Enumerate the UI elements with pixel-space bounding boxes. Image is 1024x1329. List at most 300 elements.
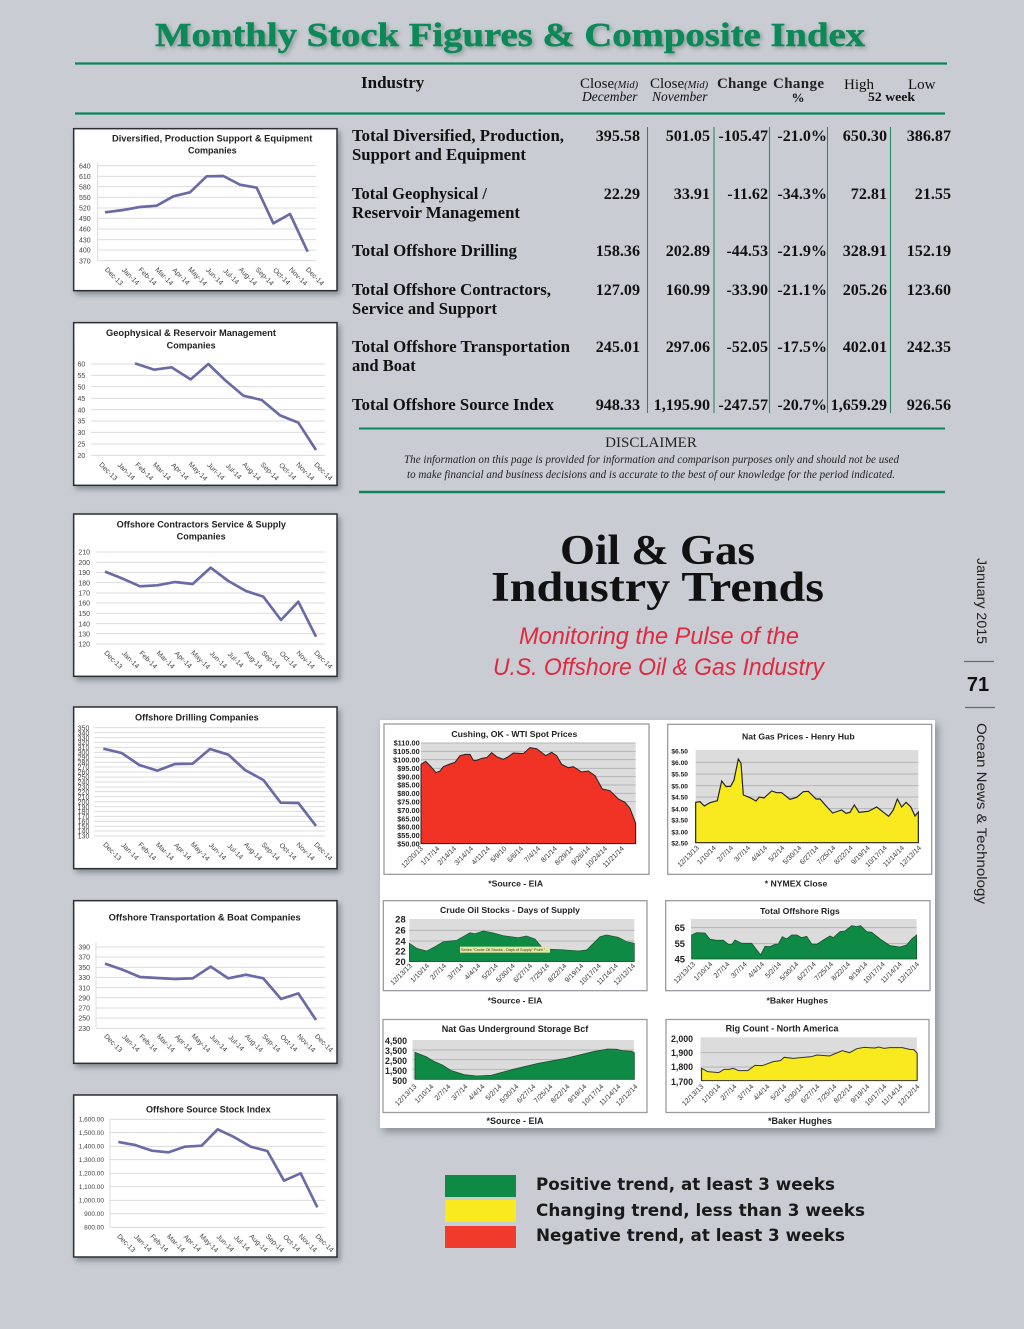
line chart: diversified: May-14: [186, 266, 208, 288]
legend: Changing trend, less than 3 weeks: [536, 1201, 865, 1221]
area chart: nat gas storage: 1,500: [385, 1066, 407, 1076]
area chart: total offshore rigs: 7/25/14: [814, 961, 835, 983]
row: drilling: [352, 241, 951, 260]
area chart: nat gas prices: 4/4/14: [750, 845, 769, 863]
line chart: diversified: 520: [79, 206, 91, 213]
table header: %: [792, 90, 804, 105]
line chart: drilling: 270: [78, 765, 89, 772]
table header: 52 week: [868, 89, 916, 104]
row: drilling: 158.36: [596, 243, 640, 260]
line chart: transportation: 290: [78, 995, 90, 1002]
area chart: nat gas prices: $4.50: [671, 795, 688, 802]
line chart: drilling: 320: [78, 740, 89, 747]
area chart: rig count: 11/14/14: [881, 1083, 904, 1107]
line chart: geophysical: Jan-14: [116, 462, 136, 482]
line chart: geophysical: Dec-13: [97, 462, 118, 482]
area chart: WTI spot prices: $65.00: [397, 814, 420, 823]
area chart: crude oil stocks: 11/14/14: [596, 963, 620, 987]
line chart: geophysical: 60: [78, 362, 85, 369]
line chart: geophysical: May-14: [187, 461, 208, 483]
area chart: total offshore rigs: 45: [675, 954, 685, 964]
line chart: source index: Sep-14: [264, 1233, 285, 1254]
line chart: source index: Mar-14: [165, 1233, 186, 1254]
line chart: diversified: Sep-14: [254, 266, 275, 287]
line chart: diversified: Jan-14: [120, 267, 140, 287]
line chart: geophysical: 35: [78, 419, 85, 426]
area chart: rig count: Rig Count - North America: [726, 1024, 839, 1034]
line chart: transportation: Nov-14: [295, 1033, 316, 1054]
sidebar folio: [964, 558, 995, 904]
line chart: drilling: 230: [78, 785, 89, 792]
area chart: nat gas storage: 4,500: [385, 1036, 407, 1046]
area chart: WTI spot prices: $100.00: [393, 755, 420, 764]
line chart: contractors: Apr-14: [173, 650, 193, 670]
area chart: WTI spot prices: $75.00: [397, 797, 420, 806]
disclaimer: [359, 428, 945, 492]
row: contractors: 205.26: [843, 282, 887, 299]
area chart: total offshore rigs: 10/17/14: [863, 961, 887, 985]
area chart: crude oil stocks: 2/7/14: [429, 963, 448, 981]
row: transportation: 242.35: [907, 339, 951, 356]
area chart: crude oil stocks: 3/7/14: [447, 963, 465, 981]
table header: December: [581, 89, 638, 104]
line chart: transportation: 310: [78, 985, 90, 992]
line chart: transportation: 230: [78, 1026, 90, 1033]
line chart: diversified: Oct-14: [271, 267, 291, 287]
area chart: WTI spot prices: $105.00: [393, 747, 420, 756]
area chart: crude oil stocks: 6/27/14: [513, 963, 534, 984]
row: diversified: Support and Equipment: [352, 145, 526, 164]
area chart: rig count: *Baker Hughes: [768, 1116, 832, 1126]
line chart: contractors: Jun-14: [208, 650, 228, 670]
line chart: drilling: 330: [78, 735, 89, 742]
area chart: rig count: 7/25/14: [817, 1083, 838, 1105]
line chart: source index: Aug-14: [248, 1233, 269, 1254]
line chart: contractors: 120: [78, 642, 90, 649]
line chart: source index: 800.00: [84, 1225, 104, 1232]
area chart: nat gas storage: 10/17/14: [581, 1083, 605, 1108]
line chart: contractors: 180: [78, 580, 90, 587]
area chart: nat gas prices: 7/25/14: [816, 845, 837, 866]
row: drilling: 152.19: [907, 243, 951, 260]
line chart: drilling: 170: [78, 814, 89, 821]
line chart: diversified: 370: [79, 258, 91, 265]
area chart: rig count: 1/10/14: [701, 1083, 722, 1105]
line chart: contractors: Mar-14: [155, 650, 175, 671]
line chart: contractors: May-14: [189, 650, 211, 671]
row: contractors: 127.09: [596, 282, 640, 299]
line chart: source index: Dec-13: [115, 1233, 136, 1254]
line chart: contractors: Companies: [177, 531, 226, 541]
area chart: WTI spot prices: [384, 724, 649, 888]
area chart: nat gas storage: 3/7/14: [451, 1083, 469, 1102]
line chart: drilling: 160: [78, 819, 89, 826]
area chart: crude oil stocks: 9/19/14: [564, 963, 585, 984]
area chart: total offshore rigs: 55: [675, 939, 685, 949]
area chart: WTI spot prices: 10/24/14: [585, 845, 609, 870]
area chart: WTI spot prices: $60.00: [397, 823, 420, 832]
line chart: diversified: Apr-14: [171, 267, 190, 287]
table header: Close(Mid): [580, 76, 639, 92]
subheading: [493, 623, 826, 681]
row: transportation: 245.01: [596, 339, 640, 356]
area chart: rig count: 2,000: [671, 1034, 693, 1044]
line chart: drilling: 280: [78, 760, 89, 767]
area chart: crude oil stocks: 10/17/14: [579, 963, 603, 987]
area chart: crude oil stocks: 4/4/14: [464, 963, 482, 981]
area chart: nat gas prices: 6/27/14: [799, 845, 820, 866]
line chart: geophysical: 40: [78, 407, 85, 414]
row: diversified: 650.30: [843, 128, 887, 145]
line chart: transportation: May-14: [190, 1033, 211, 1054]
line chart: diversified: 550: [79, 195, 91, 202]
line chart: geophysical: Jul-14: [224, 463, 242, 481]
table header: Change: [717, 76, 767, 92]
area chart: nat gas storage: 4/4/14: [468, 1083, 486, 1102]
line chart: drilling: 200: [78, 799, 89, 806]
tooltip: Series "Crude Oil Stocks - Days of Supply" Point "...: [461, 948, 548, 952]
line chart: contractors: Dec-14: [312, 650, 333, 671]
line chart: drilling: 190: [78, 804, 89, 811]
area chart: nat gas storage: 9/19/14: [567, 1083, 588, 1105]
area chart: nat gas prices: 12/12/14: [899, 845, 923, 869]
table header: November: [651, 89, 708, 104]
area chart: total offshore rigs: 12/13/13: [673, 961, 697, 985]
area chart: total offshore rigs: 12/12/14: [897, 961, 921, 985]
line chart: diversified: Jun-14: [204, 267, 224, 287]
area chart: crude oil stocks: *Source - EIA: [488, 995, 543, 1005]
area chart: nat gas prices: $4.00: [671, 806, 688, 813]
row: index: -20.7%: [777, 397, 827, 414]
area chart: WTI spot prices: $85.00: [397, 781, 420, 790]
row: contractors: Service and Support: [352, 299, 498, 318]
line chart: transportation: Aug-14: [243, 1033, 264, 1054]
line chart: drilling: Sep-14: [260, 841, 281, 862]
line chart: drilling: Oct-14: [278, 842, 297, 862]
row: geophysical: Total Geophysical /: [352, 184, 487, 203]
area chart: nat gas prices: 3/7/14: [733, 845, 752, 863]
line chart: drilling: 180: [78, 809, 89, 816]
area chart: total offshore rigs: 4/4/14: [747, 961, 766, 980]
area chart: WTI spot prices: Cushing, OK - WTI Spot Prices: [451, 729, 578, 739]
row: geophysical: Reservoir Management: [352, 203, 521, 222]
line chart: diversified: 460: [79, 227, 91, 234]
area chart: nat gas storage: 500: [392, 1076, 407, 1086]
line chart: drilling: Apr-14: [172, 842, 192, 862]
area chart: total offshore rigs: 2/7/14: [713, 961, 731, 980]
tooltip: [460, 947, 550, 953]
area chart: crude oil stocks: 5/30/14: [495, 963, 517, 984]
line chart: geophysical: 30: [78, 430, 85, 437]
area chart: total offshore rigs: 5/30/14: [779, 961, 800, 983]
line chart: diversified: 580: [79, 184, 91, 191]
area chart: WTI spot prices: 11/21/14: [602, 845, 626, 869]
area chart: rig count: 6/27/14: [800, 1083, 821, 1105]
area chart: crude oil stocks: 26: [395, 926, 406, 936]
line chart: geophysical: Dec-14: [312, 462, 333, 482]
line chart: diversified: Feb-14: [137, 267, 157, 287]
heading: oil and gas industry trends: [491, 528, 824, 611]
panel: trend charts: [380, 720, 935, 1128]
table header: [361, 73, 936, 105]
area chart: total offshore rigs: 3/7/14: [730, 961, 749, 980]
line chart: source index: 1,600.00: [79, 1117, 104, 1124]
line chart: drilling: 210: [78, 794, 89, 801]
line chart: drilling: Nov-14: [295, 842, 316, 862]
line chart: source index: 1,400.00: [79, 1144, 104, 1151]
line chart: contractors: 200: [78, 560, 90, 567]
line chart: transportation: Mar-14: [155, 1033, 176, 1054]
area chart: total offshore rigs: 5/2/14: [764, 961, 783, 980]
line chart: source index: Apr-14: [182, 1234, 202, 1254]
area chart: nat gas prices: $6.50: [671, 749, 688, 756]
legend: Positive trend, at least 3 weeks: [536, 1175, 835, 1195]
line chart: diversified: Mar-14: [153, 267, 174, 287]
area chart: nat gas prices: 9/19/14: [850, 845, 872, 866]
area chart: crude oil stocks: 7/25/14: [530, 963, 551, 984]
line chart: drilling: 290: [78, 755, 89, 762]
row: contractors: 123.60: [907, 282, 951, 299]
area chart: nat gas storage: 1/10/14: [414, 1083, 435, 1105]
area chart: WTI spot prices: 3/14/14: [454, 845, 475, 867]
area chart: rig count: 12/13/13: [681, 1083, 705, 1108]
area chart: rig count: 1,800: [671, 1062, 693, 1072]
area chart: total offshore rigs: *Baker Hughes: [767, 995, 828, 1005]
line chart: transportation: Oct-14: [279, 1034, 298, 1054]
line chart: diversified: Nov-14: [287, 267, 308, 287]
area chart: nat gas prices: Nat Gas Prices - Henry Hub: [742, 731, 855, 741]
line chart: geophysical: Nov-14: [294, 462, 315, 482]
area chart: nat gas prices: $6.00: [671, 760, 688, 767]
area chart: nat gas prices: $3.50: [671, 818, 688, 825]
table header: Change: [773, 76, 824, 92]
area chart: rig count: 4/4/14: [753, 1083, 771, 1102]
row: diversified: 501.05: [666, 128, 710, 145]
line chart: transportation: Jun-14: [208, 1034, 228, 1054]
line chart: transportation: Apr-14: [173, 1034, 193, 1054]
row: drilling: 328.91: [843, 243, 887, 260]
disclaimer: to make financial and business decisions and is accurate to the best of our knowledge for the period indicated.: [407, 469, 895, 481]
row: transportation: -17.5%: [777, 339, 827, 356]
line chart: transportation: 390: [78, 945, 90, 952]
area chart: nat gas storage: *Source - EIA: [486, 1116, 544, 1126]
line chart: source index: Offshore Source Stock Index: [146, 1104, 271, 1114]
row: diversified: 395.58: [596, 128, 640, 145]
line chart: drilling: 220: [78, 789, 89, 796]
row: index: Total Offshore Source Index: [352, 395, 555, 414]
line chart: contractors: 150: [78, 611, 90, 618]
row: diversified: 386.87: [907, 128, 951, 145]
area chart: WTI spot prices: 8/29/14: [554, 845, 575, 867]
line chart: transportation: [74, 901, 337, 1063]
row: contractors: -21.1%: [777, 282, 827, 299]
line chart: contractors: 210: [78, 550, 90, 557]
area chart: WTI spot prices: 7/4/14: [523, 845, 542, 864]
line chart: diversified: Jul-14: [222, 268, 240, 286]
row: diversified: -105.47: [718, 128, 768, 145]
row: diversified: [352, 126, 951, 164]
area chart: nat gas storage: [383, 1020, 647, 1126]
area chart: nat gas storage: 2/7/14: [434, 1083, 452, 1102]
area chart: nat gas prices: * NYMEX Close: [765, 879, 827, 889]
area chart: nat gas storage: 5/2/14: [485, 1083, 503, 1102]
line chart: transportation: Dec-13: [102, 1033, 123, 1054]
line chart: diversified: 640: [79, 163, 91, 170]
line chart: contractors: Oct-14: [278, 650, 298, 670]
table header: Close(Mid): [650, 76, 709, 92]
row: contractors: 160.99: [666, 282, 710, 299]
subheading: U.S. Offshore Oil & Gas Industry: [493, 654, 826, 681]
area chart: nat gas prices: 5/2/14: [768, 845, 786, 863]
table header: Low: [908, 77, 936, 93]
area chart: rig count: 9/19/14: [850, 1083, 871, 1105]
area chart: crude oil stocks: 1/10/14: [410, 963, 431, 984]
row: drilling: -21.9%: [777, 243, 827, 260]
area chart: nat gas prices: 11/14/14: [882, 845, 906, 869]
line chart: source index: 1,300.00: [79, 1157, 104, 1164]
line chart: geophysical: Companies: [167, 340, 216, 350]
line chart: source index: [74, 1095, 337, 1257]
line chart: diversified: Companies: [188, 146, 237, 156]
line chart: drilling: Feb-14: [136, 842, 157, 862]
line chart: contractors: Dec-13: [102, 650, 123, 671]
line chart: transportation: 370: [78, 955, 90, 962]
disclaimer: DISCLAIMER: [605, 435, 697, 451]
line chart: geophysical: Sep-14: [259, 461, 280, 482]
area chart: crude oil stocks: 8/22/14: [547, 963, 568, 984]
line chart: transportation: 350: [78, 965, 90, 972]
row: drilling: -44.53: [726, 243, 768, 260]
line chart: diversified: Diversified, Production Support & Equipment: [112, 133, 312, 143]
line chart: contractors: Jul-14: [226, 651, 244, 670]
line chart: transportation: Jan-14: [120, 1034, 140, 1054]
line chart: transportation: Feb-14: [137, 1033, 158, 1054]
area chart: nat gas storage: 6/27/14: [516, 1083, 537, 1105]
line chart: geophysical: Geophysical & Reservoir Management: [106, 328, 276, 338]
line chart: geophysical: Aug-14: [241, 461, 262, 482]
table header: High: [844, 77, 874, 93]
line chart: transportation: 270: [78, 1006, 90, 1013]
row: geophysical: 21.55: [915, 186, 951, 203]
line chart: drilling: Mar-14: [154, 842, 175, 862]
area chart: WTI spot prices: 9/26/14: [571, 845, 592, 867]
line chart: diversified: Dec-13: [103, 267, 124, 287]
area chart: total offshore rigs: 65: [675, 923, 685, 933]
row: index: 1,659.29: [831, 397, 887, 414]
line chart: drilling: Jul-14: [226, 843, 244, 861]
area chart: nat gas prices: $2.50: [671, 841, 688, 848]
line chart: source index: 1,500.00: [79, 1130, 104, 1137]
line chart: contractors: Jan-14: [120, 650, 140, 670]
row: contractors: -33.90: [726, 282, 768, 299]
row: diversified: -21.0%: [777, 128, 827, 145]
line chart: transportation: Dec-14: [313, 1033, 334, 1054]
line chart: source index: May-14: [198, 1233, 219, 1254]
line chart: diversified: 610: [79, 174, 91, 181]
line chart: contractors: Aug-14: [242, 650, 263, 671]
area chart: WTI spot prices: $80.00: [397, 789, 420, 798]
area chart: rig count: 1,900: [671, 1048, 693, 1058]
line chart: source index: Jan-14: [132, 1234, 152, 1254]
line chart: geophysical: Oct-14: [277, 462, 297, 482]
line chart: source index: Feb-14: [148, 1233, 169, 1254]
line chart: drilling: Offshore Drilling Companies: [135, 713, 259, 723]
area chart: nat gas prices: [668, 724, 932, 889]
area chart: rig count: [666, 1020, 929, 1126]
line chart: drilling: 250: [78, 775, 89, 782]
area chart: crude oil stocks: 22: [395, 946, 406, 956]
area chart: total offshore rigs: [666, 901, 930, 1005]
line chart: source index: Dec-14: [314, 1233, 335, 1254]
area chart: total offshore rigs: 1/10/14: [693, 961, 714, 983]
area chart: nat gas storage: 12/12/14: [615, 1083, 639, 1108]
line chart: diversified: 400: [79, 248, 91, 255]
row: geophysical: -34.3%: [777, 186, 827, 203]
line chart: drilling: 340: [78, 730, 89, 737]
area chart: WTI spot prices: *Source - EIA: [488, 878, 544, 888]
area chart: WTI spot prices: 12/20/13: [401, 845, 425, 870]
area chart: WTI spot prices: 2/14/14: [437, 845, 458, 867]
area chart: rig count: 1,700: [671, 1077, 693, 1087]
area chart: rig count: 12/12/14: [897, 1083, 921, 1108]
line chart: geophysical: Mar-14: [151, 462, 172, 482]
area chart: WTI spot prices: $50.00: [397, 840, 420, 849]
line chart: drilling: Dec-13: [101, 842, 122, 862]
line chart: geophysical: 25: [78, 442, 85, 449]
row: transportation: -52.05: [726, 339, 768, 356]
line chart: geophysical: [74, 323, 337, 485]
line chart: drilling: 300: [78, 750, 89, 757]
area chart: nat gas prices: 1/10/14: [696, 845, 718, 866]
area chart: crude oil stocks: 12/13/13: [390, 963, 414, 987]
row: geophysical: 33.91: [674, 186, 710, 203]
area chart: nat gas storage: 5/30/14: [499, 1083, 520, 1105]
row: index: 926.56: [907, 397, 951, 414]
line chart: drilling: 240: [78, 780, 89, 787]
line chart: transportation: 330: [78, 975, 90, 982]
area chart: total offshore rigs: 11/14/14: [880, 961, 904, 985]
area chart: nat gas prices: 10/17/14: [865, 845, 889, 869]
line chart: source index: Oct-14: [281, 1234, 301, 1254]
area chart: total offshore rigs: 9/19/14: [848, 961, 869, 983]
row: drilling: Total Offshore Drilling: [352, 241, 518, 260]
area chart: nat gas storage: Nat Gas Underground Storage Bcf: [442, 1024, 589, 1034]
line chart: drilling: 150: [78, 824, 89, 831]
line chart: geophysical: 55: [78, 373, 85, 380]
area chart: crude oil stocks: 5/2/14: [481, 963, 500, 981]
line chart: transportation: Sep-14: [260, 1033, 281, 1054]
line chart: diversified: [74, 129, 337, 291]
area chart: rig count: 8/22/14: [833, 1083, 854, 1105]
table rows: [352, 126, 951, 414]
area chart: total offshore rigs: 8/22/14: [831, 961, 852, 983]
row: geophysical: 22.29: [604, 186, 640, 203]
row: transportation: 402.01: [843, 339, 887, 356]
line chart: contractors: 130: [78, 631, 90, 638]
line chart: contractors: 140: [78, 621, 90, 628]
row: geophysical: -11.62: [727, 186, 768, 203]
line chart: contractors: 170: [78, 591, 90, 598]
area chart: nat gas prices: 5/30/14: [782, 845, 803, 866]
line chart: drilling: 260: [78, 770, 89, 777]
area chart: nat gas prices: $5.00: [671, 783, 688, 790]
row: transportation: 297.06: [666, 339, 710, 356]
line chart: geophysical: Apr-14: [170, 462, 189, 482]
line chart: contractors: Feb-14: [137, 650, 158, 671]
row: index: [352, 395, 951, 414]
sidebar folio: Ocean News & Technology: [974, 723, 990, 904]
line chart: drilling: 310: [78, 745, 89, 752]
